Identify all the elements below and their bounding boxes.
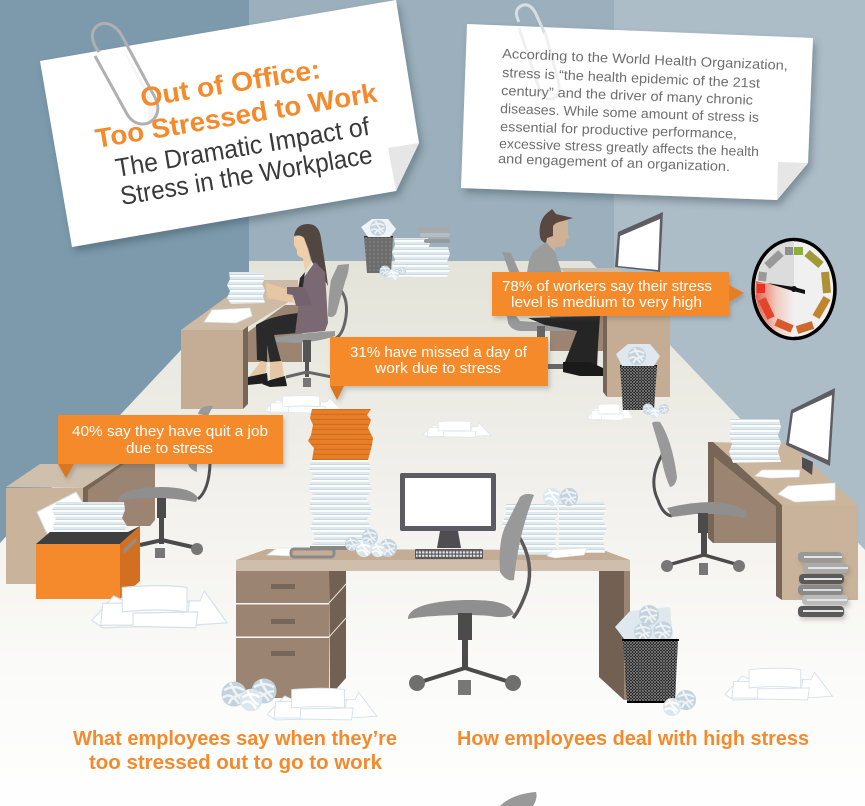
callout: 40 percent: 40% say they have quit a job bbox=[72, 424, 268, 440]
desk: woman bbox=[181, 272, 302, 409]
book stack bbox=[798, 552, 848, 617]
callout: 31 percent: 31% have missed a day of bbox=[350, 345, 528, 361]
text: introduction: excessive stress greatly affects the health bbox=[499, 136, 759, 159]
chair back fragment at bottom edge bbox=[500, 792, 537, 806]
desk: left bbox=[6, 464, 155, 584]
waste basket: back bbox=[361, 219, 396, 273]
icon: stress gauge clock bbox=[753, 240, 835, 338]
waste basket: man bbox=[616, 344, 669, 418]
monitor: man bbox=[615, 212, 663, 272]
heading: what employees say bbox=[73, 727, 397, 774]
paper stacks: main desk right bbox=[502, 488, 607, 558]
monitor: main desk bbox=[400, 473, 496, 548]
left desk with orange box bbox=[6, 406, 227, 628]
wall: left panel bbox=[0, 0, 249, 560]
chair: woman bbox=[272, 264, 349, 387]
heading: title: The Dramatic Impact of bbox=[113, 111, 372, 183]
office floor bbox=[0, 261, 865, 806]
keyboard bbox=[415, 549, 483, 559]
paperclip: title bbox=[92, 23, 158, 124]
woman at back-left desk bbox=[181, 224, 349, 409]
text: introduction: According to the World Health Organization, bbox=[502, 46, 788, 73]
callout: 78 percent: level is medium to very high bbox=[511, 295, 702, 311]
tall paper stack bbox=[308, 409, 373, 546]
text: introduction: and engagement of an organization. bbox=[498, 151, 730, 174]
man at back-right desk bbox=[502, 209, 670, 397]
callout: 40 percent: due to stress bbox=[126, 441, 213, 457]
desk top bbox=[236, 549, 630, 571]
heading: what employees say: too stressed out to go to work bbox=[89, 751, 383, 774]
person: man bbox=[527, 209, 603, 376]
note: title bbox=[40, 0, 419, 247]
chair: man bbox=[502, 252, 578, 369]
desk legs and drawers bbox=[236, 571, 630, 700]
papers: right desk bbox=[755, 470, 835, 502]
callout: 31 percent: work due to stress bbox=[374, 361, 501, 377]
loose papers: left bbox=[92, 586, 227, 628]
crumpled paper: bottom centre bbox=[222, 678, 276, 711]
note: introduction bbox=[461, 5, 813, 200]
chair: left bbox=[118, 406, 213, 558]
heading: how employees deal: How employees deal with high stress bbox=[457, 727, 809, 750]
paper stack in box bbox=[37, 492, 127, 545]
callout: 78 percent: 78% of workers say their stress bbox=[502, 279, 712, 295]
heading: title: Too Stressed to Work bbox=[93, 78, 380, 154]
monitor: right desk bbox=[786, 388, 835, 475]
desk: man bbox=[550, 268, 670, 397]
chair: main bbox=[408, 494, 534, 695]
main desk bbox=[236, 409, 630, 700]
desk: right bbox=[708, 442, 858, 600]
paper stack: back bbox=[392, 227, 450, 277]
heading: what employees say: What employees say when they’re bbox=[73, 727, 397, 750]
text: introduction: stress is “the health epidemic of the 21st bbox=[502, 65, 761, 91]
callout: 78 percent bbox=[492, 272, 744, 316]
loose papers: bottom centre bbox=[267, 688, 377, 720]
heading: title bbox=[93, 54, 380, 211]
chair: right bbox=[652, 422, 747, 575]
right desk bbox=[652, 388, 858, 617]
callout: 40 percent bbox=[58, 415, 283, 478]
orange file box bbox=[36, 526, 140, 599]
text: introduction: century” and the driver of many chronic bbox=[501, 83, 754, 108]
text: introduction bbox=[498, 46, 788, 174]
crumpled paper: main desk bbox=[345, 529, 397, 557]
person: woman bbox=[248, 224, 328, 387]
waste basket and paper stacks at back bbox=[361, 219, 450, 281]
paperclip: introduction bbox=[516, 5, 559, 99]
wall: middle panel bbox=[249, 0, 614, 300]
loose papers on floor: middle bbox=[265, 396, 633, 437]
paper stack: right desk bbox=[729, 419, 781, 463]
wall: right panel bbox=[614, 0, 865, 560]
callout: 31 percent bbox=[330, 337, 548, 400]
crumpled paper: back bbox=[380, 266, 406, 281]
waste basket: main bbox=[615, 605, 696, 716]
orange paper stack bbox=[308, 409, 373, 460]
text: introduction: diseases. While some amount of stress is bbox=[500, 101, 760, 125]
stapler and small paper bbox=[267, 546, 350, 557]
heading: title: Out of Office: bbox=[138, 54, 323, 113]
loose papers: bottom right bbox=[725, 668, 832, 700]
heading: title: Stress in the Workplace bbox=[118, 139, 374, 211]
text: introduction: essential for productive performance, bbox=[500, 119, 737, 141]
